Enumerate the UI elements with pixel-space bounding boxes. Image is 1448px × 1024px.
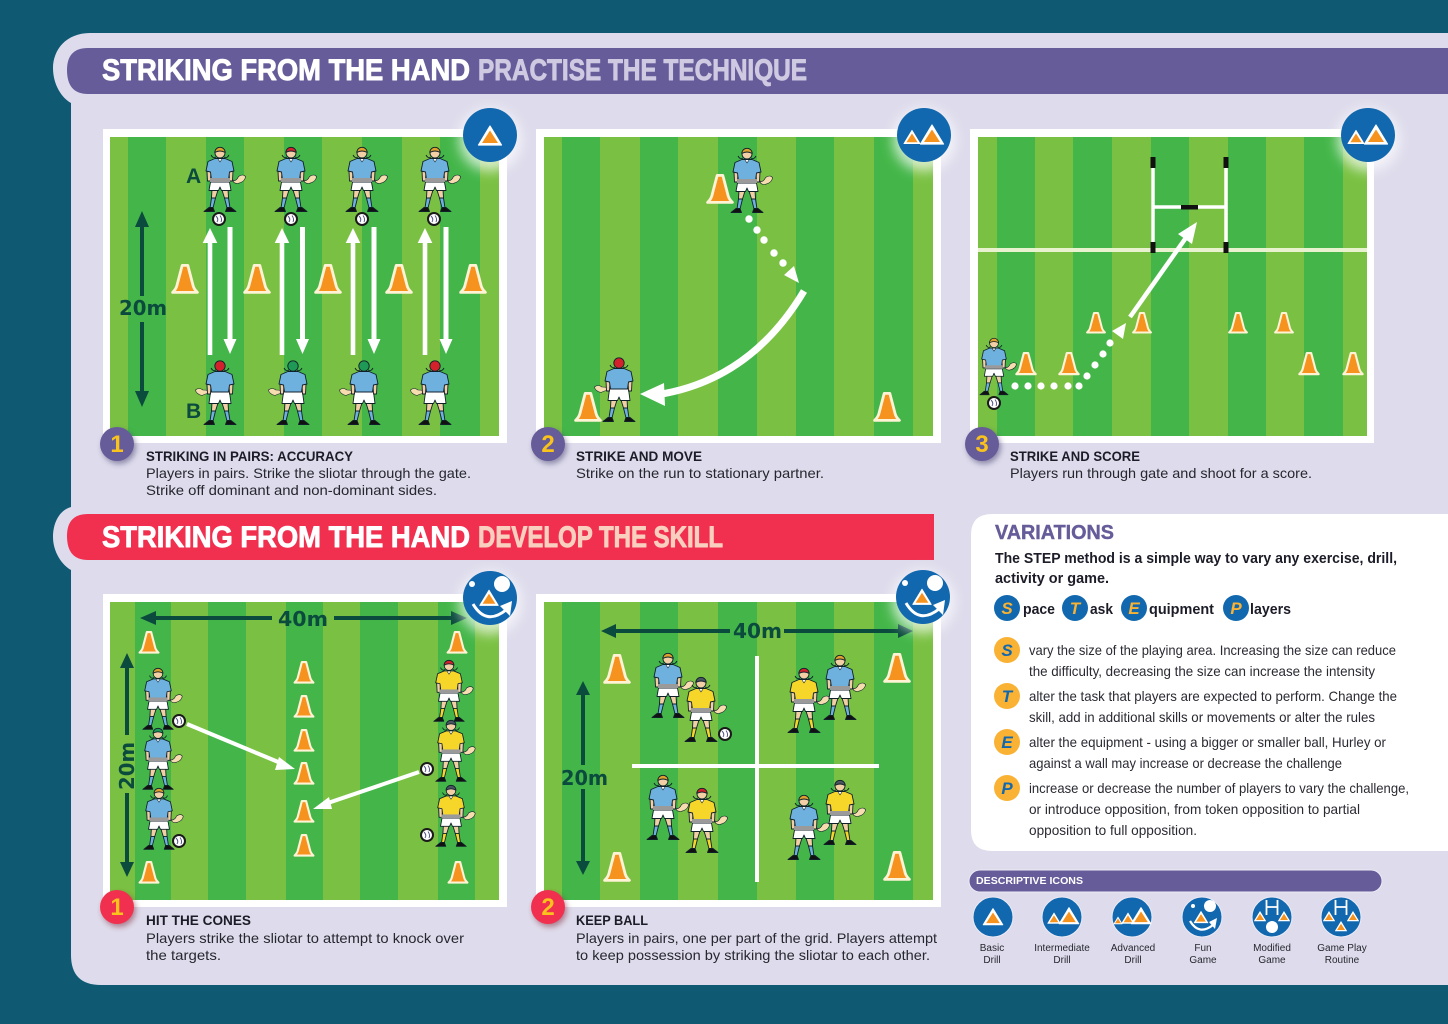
heading: practise the technique: PRACTISE THE TECHNIQUE [478,54,807,87]
item: space [994,637,1396,679]
legend icon: fun game [1182,897,1222,966]
caption: keep ball [576,912,937,963]
caption: keep ball: KEEP BALL [576,912,648,928]
sliotar [988,397,1000,409]
item: players [994,775,1409,838]
legend icon: modified game: Modified [1253,943,1291,954]
20m dimension arrow: 20m [119,296,167,320]
caption: hit the cones: the targets. [146,947,221,963]
heading: practise the technique: STRIKING FROM THE HAND [102,54,470,87]
legend icon: intermediate drill [1034,897,1090,966]
40m dimension arrow [601,619,913,643]
number badge 2 purple: 2 [541,431,555,458]
legend icon: game play routine: Routine [1325,955,1360,966]
legend icon: advanced drill: Advanced [1111,943,1155,954]
shot arrow [1130,222,1197,317]
caption: strike and move: Strike on the run to stationary partner. [576,465,824,481]
20m dimension arrow [119,211,167,407]
legend icon: game play routine: Game Play [1317,943,1367,954]
caption: strike and score [1010,448,1312,481]
badge icon: intermediate drill [1337,108,1399,171]
label A: A [186,165,201,188]
40m dimension arrow: 40m [278,607,328,631]
sliotars [173,715,433,847]
STEP key: ask [1090,602,1114,618]
STEP key: P [1230,599,1242,618]
goal posts [1150,157,1228,253]
STEP key: layers [1250,602,1291,618]
item: equipment: E [1001,733,1013,752]
STEP key: T [1070,599,1082,618]
item: task: skill, add in additional skills or movements or alter the rules [1029,709,1375,725]
panel: variations [971,514,1448,851]
STEP key [994,595,1291,621]
STEP key: quipment [1149,602,1214,618]
20m dimension arrow [561,681,608,875]
sliotars [213,213,440,225]
cones [173,265,485,292]
caption: strike and move [576,448,824,481]
descriptive icons heading bar: DESCRIPTIVE ICONS [976,875,1083,887]
legend icon: advanced drill: Drill [1124,955,1142,966]
goal line [978,248,1367,252]
strike arrows [187,724,419,809]
receiving player [594,358,635,422]
legend icon: intermediate drill: Drill [1053,955,1071,966]
legend icon: fun game: Fun [1194,943,1212,954]
item: players: increase or decrease the number of players to vary the challenge, [1029,780,1409,796]
drill 2: strike and move pitch [536,129,941,443]
dotted run arrow [1011,323,1126,390]
number badge 1 red: 1 [110,894,124,921]
label B: B [186,400,201,423]
strike arrows [203,227,452,355]
cones [1016,313,1363,374]
badge icon: fun game [459,571,521,634]
item: players: P [1001,779,1013,798]
caption: keep ball: to keep possession by striking the sliotar to each other. [576,947,930,963]
drill 3: strike and score pitch [970,129,1374,443]
curved strike arrow [640,291,804,406]
number badge 3 purple [965,427,1001,464]
20m dimension arrow: 20m [115,742,139,790]
players row A [204,147,460,212]
20m dimension arrow: 20m [561,766,608,790]
drill 5: keep ball pitch [536,594,941,907]
badge icon: fun game [892,570,954,633]
heading: develop the skill [67,514,934,560]
item: players: or introduce opposition, from token opposition to partial [1029,801,1360,817]
number badge 1 purple: 1 [110,431,124,458]
grid lines [632,656,879,882]
item: space: S [1001,641,1013,660]
badge icon: intermediate drill [893,108,955,171]
caption: striking in pairs: Strike off dominant and non-dominant sides. [146,482,437,498]
heading: develop the skill: DEVELOP THE SKILL [478,521,723,554]
caption: strike and score: STRIKE AND SCORE [1010,448,1140,464]
number badge 2 purple [531,427,567,464]
40m dimension arrow: 40m [733,619,782,643]
item: space: the difficulty, decreasing the size can increase the intensity [1029,663,1375,679]
drill 4: hit the cones pitch [103,594,507,907]
STEP key: S [1001,599,1013,618]
heading: develop the skill: STRIKING FROM THE HAND [102,521,470,554]
number badge 2 red: 2 [541,894,555,921]
blue players [143,668,183,849]
number badge 2 red [531,890,567,927]
STEP key: pace [1023,602,1055,618]
variations intro: The STEP method is a simple way to vary any exercise, drill, [995,551,1397,567]
badge icon: basic drill [459,108,521,171]
legend icon: basic drill [973,897,1013,966]
number badge 1 red [100,890,136,927]
item: players: opposition to full opposition. [1029,822,1197,838]
players row B [196,361,451,424]
player [980,338,1016,395]
item: equipment: against a wall may increase or decrease the challenge [1029,755,1342,771]
caption: keep ball: Players in pairs, one per part of the grid. Players attempt [576,930,937,946]
item: space: vary the size of the playing area. Increasing the size can reduce [1029,642,1396,658]
variations intro [995,551,1397,587]
20m dimension arrow [115,653,139,877]
legend icon: basic drill: Drill [983,955,1001,966]
caption: hit the cones: HIT THE CONES [146,912,251,928]
legend icon: fun game: Game [1189,955,1217,966]
legend icon: modified game: Game [1258,955,1286,966]
caption: hit the cones: Players strike the sliotar to attempt to knock over [146,930,464,946]
number badge 1 purple [100,427,136,464]
legend icon: basic drill: Basic [980,943,1004,954]
cones [140,632,467,883]
legend icon: game play routine [1317,897,1367,966]
item: equipment: alter the equipment - using a bigger or smaller ball, Hurley or [1029,734,1386,750]
cones [605,654,909,880]
legend icon: advanced drill [1111,897,1155,966]
cones [576,175,899,420]
legend icon: intermediate drill: Intermediate [1034,943,1090,954]
players [647,653,866,860]
caption: striking in pairs [146,448,471,498]
item: task [994,683,1397,725]
item: task: T [1002,687,1014,706]
yellow players [434,660,475,846]
item: task: alter the task that players are expected to perform. Change the [1029,688,1397,704]
40m dimension arrow [140,607,467,631]
drill 1: striking in pairs pitch [103,129,507,443]
sliotar [719,728,731,740]
variations intro: activity or game. [995,571,1109,587]
player with cone [731,148,772,212]
caption: striking in pairs: Players in pairs. Strike the sliotar through the gate. [146,465,471,481]
caption: strike and move: STRIKE AND MOVE [576,448,702,464]
caption: striking in pairs: STRIKING IN PAIRS: ACCURACY [146,448,354,464]
variations heading: VARIATIONS [995,522,1114,544]
caption: hit the cones [146,912,464,963]
legend icon: modified game [1252,897,1292,966]
item: equipment [994,729,1386,771]
dotted run arrow [745,215,799,283]
descriptive icons heading bar [969,870,1382,892]
caption: strike and score: Players run through gate and shoot for a score. [1010,465,1312,481]
STEP key: E [1128,599,1140,618]
number badge 3 purple: 3 [975,431,989,458]
heading: practise the technique [67,48,1448,94]
